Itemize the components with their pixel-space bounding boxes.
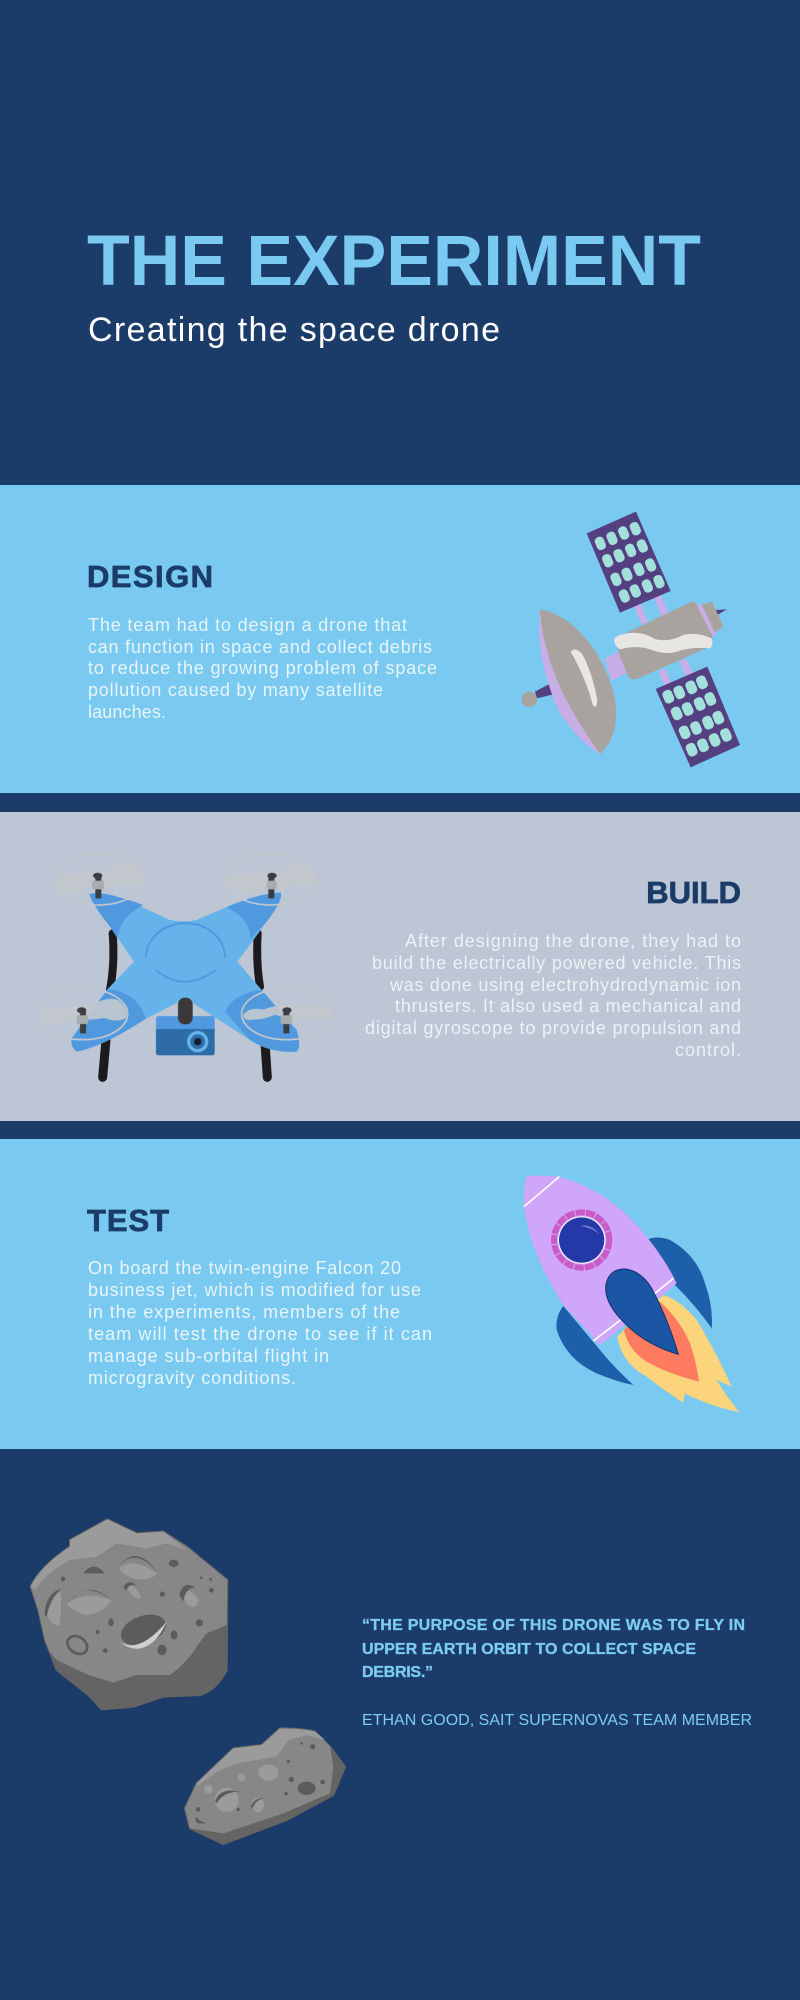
icon: satellite bbox=[522, 512, 740, 767]
quote attribution: ETHAN GOOD, SAIT SUPERNOVAS TEAM MEMBER bbox=[362, 1712, 752, 1729]
text block: build: control. bbox=[675, 1040, 741, 1060]
text block: build: build the electrically powered vehicle. This bbox=[372, 953, 741, 973]
icon: small asteroid bbox=[185, 1728, 345, 1844]
quote text: UPPER EARTH ORBIT TO COLLECT SPACE bbox=[362, 1641, 696, 1658]
text block: test: in the experiments, members of the bbox=[88, 1302, 400, 1322]
text block: test: team will test the drone to see if it can bbox=[88, 1324, 432, 1344]
text block: design: launches. bbox=[88, 702, 166, 722]
panel: test bbox=[0, 1139, 800, 1449]
text block: design: The team had to design a drone that bbox=[88, 615, 407, 635]
text block: test bbox=[88, 1258, 432, 1388]
subtitle: Creating the space drone bbox=[88, 311, 500, 349]
text block: build: was done using electrohydrodynamic ion bbox=[389, 975, 741, 995]
text block: design bbox=[88, 615, 437, 722]
panel: design bbox=[0, 485, 800, 793]
icon: drone bbox=[38, 854, 332, 1077]
text block: test: business jet, which is modified for use bbox=[88, 1280, 421, 1300]
callout: quote bbox=[362, 1617, 752, 1729]
icon: large asteroid bbox=[31, 1519, 227, 1709]
text block: build: digital gyroscope to provide propulsion and bbox=[365, 1018, 741, 1038]
heading: test: TEST bbox=[87, 1203, 169, 1238]
text block: build: thrusters. It also used a mechanical and bbox=[395, 996, 741, 1016]
text block: design: pollution caused by many satellite bbox=[88, 680, 383, 700]
quote text: DEBRIS.” bbox=[362, 1664, 433, 1681]
text block: test: On board the twin-engine Falcon 20 bbox=[88, 1258, 401, 1278]
title: THE EXPERIMENT bbox=[87, 222, 701, 301]
text block: design: can function in space and collect debris bbox=[88, 637, 432, 657]
heading: design: DESIGN bbox=[87, 559, 213, 594]
panel: build bbox=[0, 812, 800, 1121]
text block: design: to reduce the growing problem of space bbox=[88, 658, 437, 678]
quote text: “THE PURPOSE OF THIS DRONE WAS TO FLY IN bbox=[362, 1617, 745, 1634]
text block: test: microgravity conditions. bbox=[88, 1368, 296, 1388]
header panel bbox=[87, 222, 701, 349]
text block: test: manage sub-orbital flight in bbox=[88, 1346, 329, 1366]
quote text bbox=[362, 1617, 745, 1681]
heading: build: BUILD bbox=[646, 875, 741, 910]
text block: build: After designing the drone, they had to bbox=[405, 931, 741, 951]
icon: rocket bbox=[524, 1176, 739, 1412]
text block: build bbox=[365, 931, 741, 1060]
